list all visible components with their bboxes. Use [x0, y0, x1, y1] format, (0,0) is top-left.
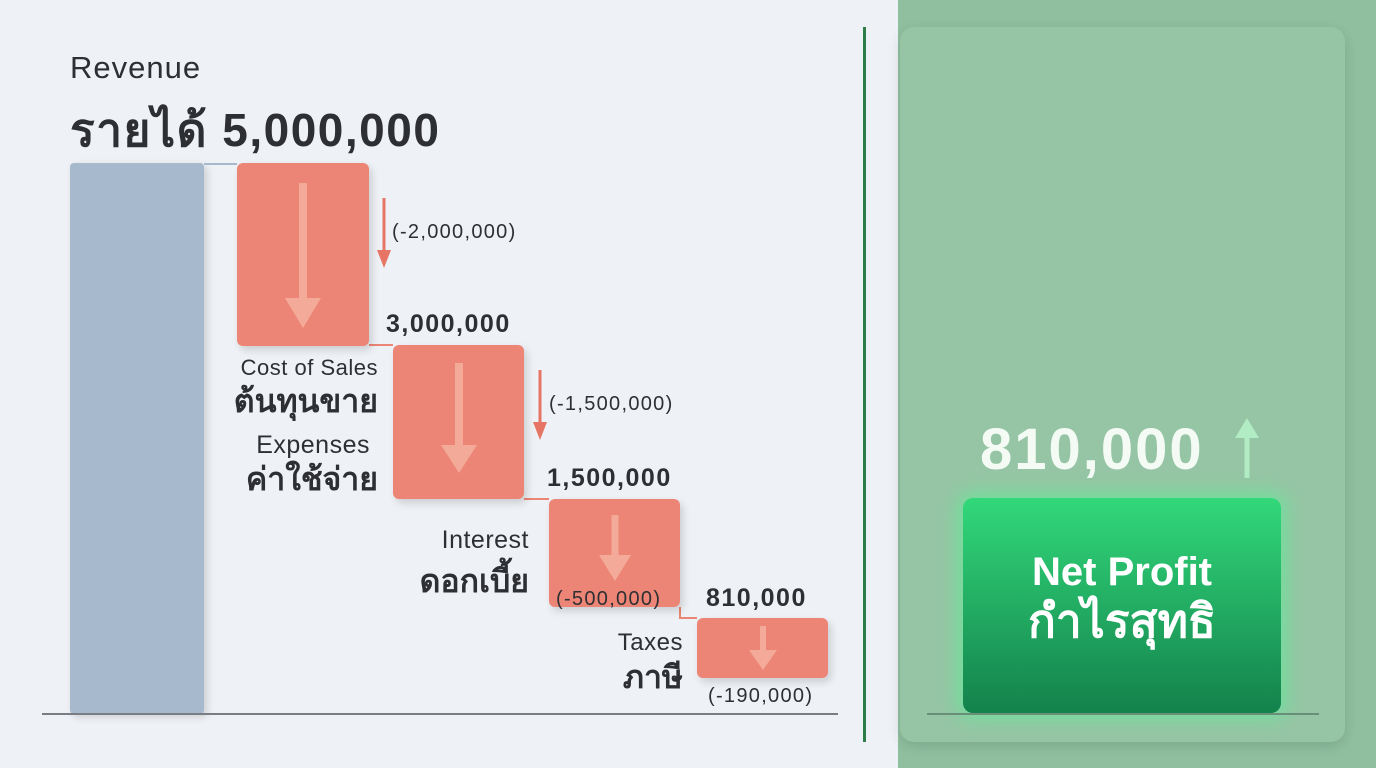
labels: Cost of Sales: [241, 355, 378, 380]
text: (-1,500,000): [549, 393, 674, 415]
arrow: -1,500,000: [533, 370, 547, 440]
waterfall connectors: [369, 344, 697, 619]
net profit box: กำไรสุทธิ: [1028, 595, 1216, 647]
title: รายได้ 5,000,000: [70, 104, 440, 156]
box: interest: [549, 499, 680, 607]
box: expenses: [393, 345, 524, 499]
text: 1,500,000: [547, 464, 672, 492]
title: [70, 50, 440, 156]
text: Interest: [442, 526, 529, 554]
values: (-2,000,000): [392, 221, 517, 243]
net profit value: 810,000: [980, 417, 1204, 482]
text: ดอกเบี้ย: [420, 563, 529, 599]
text: ค่าใช้จ่าย: [246, 461, 378, 497]
box: taxes: [697, 618, 828, 678]
text: ต้นทุนขาย: [234, 383, 378, 419]
baseline: [42, 713, 838, 715]
net profit box: [963, 498, 1281, 713]
text: Taxes: [618, 629, 683, 656]
text: ภาษี: [623, 659, 683, 695]
net profit box: Net Profit: [1032, 550, 1212, 594]
divider: [863, 27, 866, 742]
up arrow: [1235, 418, 1259, 478]
text: (-500,000): [556, 588, 661, 610]
arrow: -2,000,000: [377, 198, 391, 268]
box: cost of sales: [237, 163, 369, 346]
text: (-190,000): [708, 685, 813, 707]
title: Revenue: [70, 50, 201, 85]
text: Expenses: [256, 431, 370, 459]
text: 3,000,000: [386, 310, 511, 338]
right panel: [898, 0, 1376, 768]
text: 810,000: [706, 584, 807, 612]
card: [900, 27, 1345, 742]
revenue bar: [70, 163, 204, 714]
